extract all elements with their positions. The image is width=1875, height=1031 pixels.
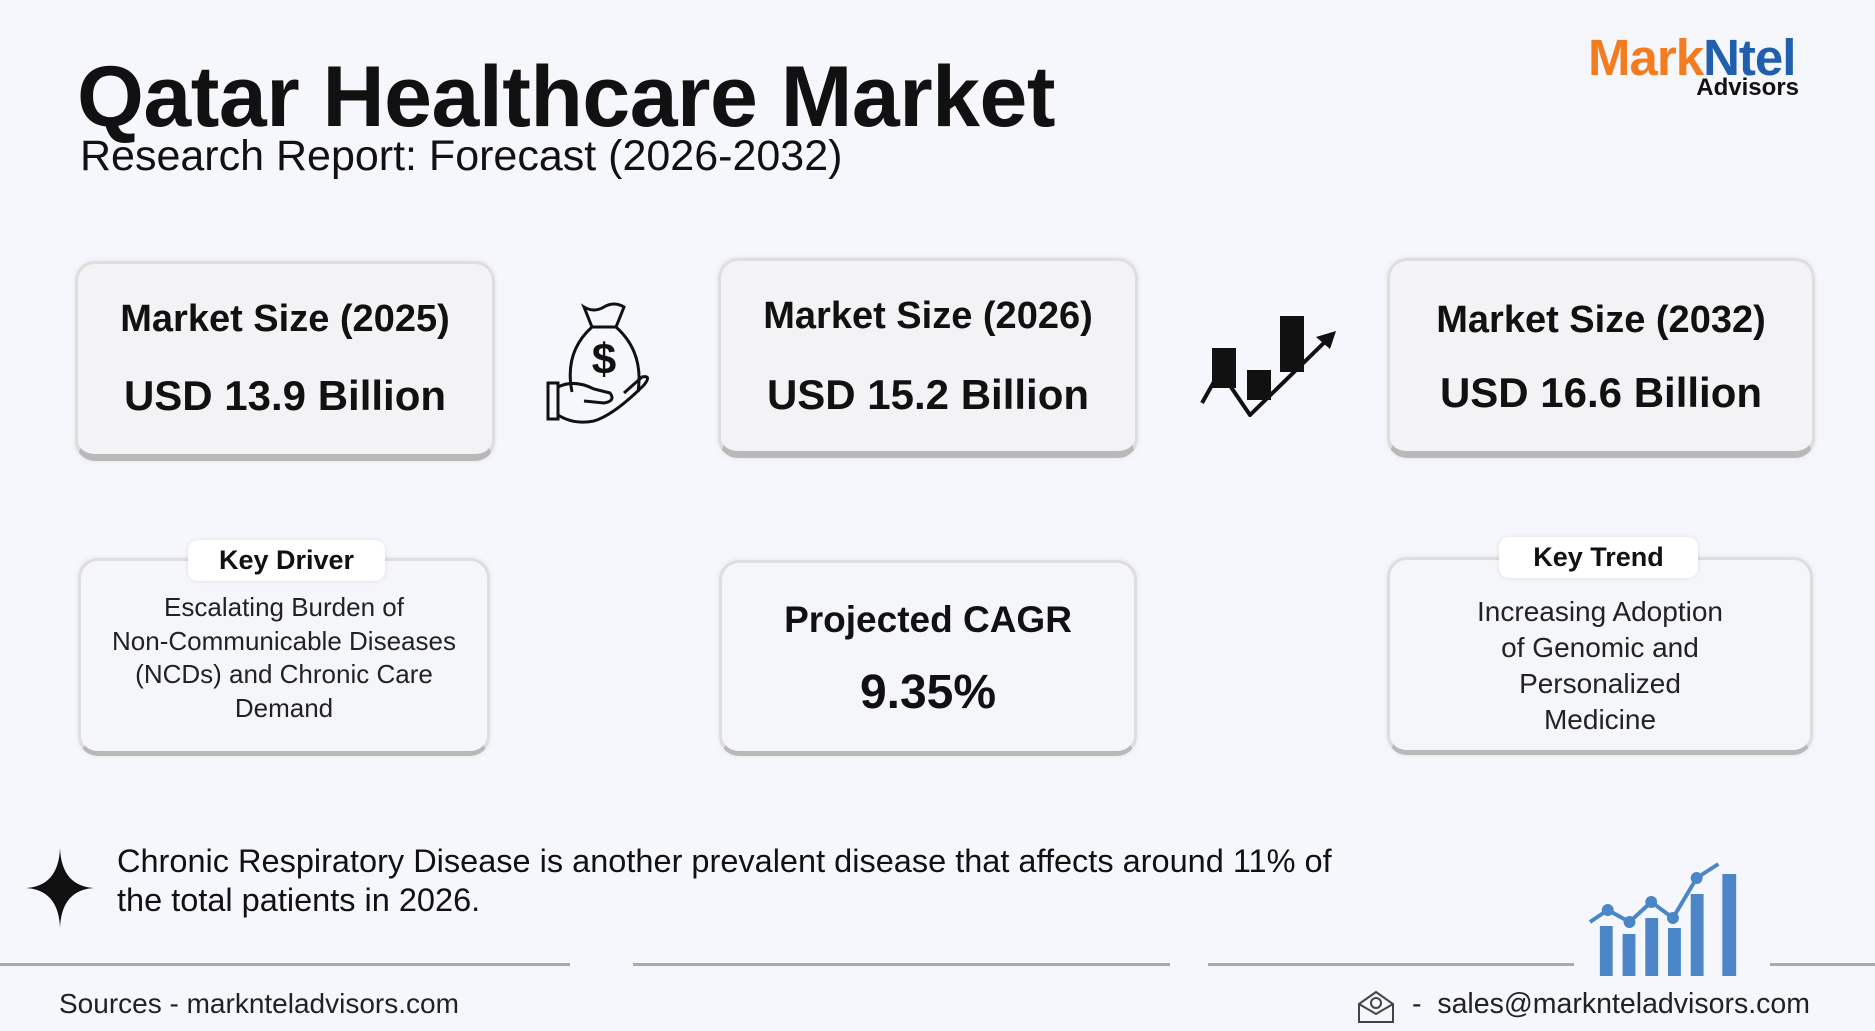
icon: growth chart arrow [1200,316,1336,417]
card: market size 2032: USD 16.6 Billion [1440,369,1762,416]
card: market size 2025: Market Size (2025) [120,298,450,340]
tab: key trend [1499,537,1698,578]
panel: projected CAGR: Projected CAGR [784,599,1072,640]
panel: key driver: Non-Communicable Diseases [112,626,456,656]
tab: key driver [188,540,385,581]
panel: key driver [78,558,490,756]
title: Qatar Healthcare Market [77,49,1055,145]
tab: key trend: Key Trend [1533,542,1664,572]
panel: projected CAGR: 9.35% [860,666,996,719]
card: market size 2025 [75,261,495,461]
panel: key trend: of Genomic and [1501,632,1699,663]
logo: MarkNtel [1588,29,1795,86]
callout text: Chronic Respiratory Disease is another prevalent disease that affects around 11% of [117,843,1332,879]
logo: Advisors [1696,74,1799,101]
footer: email: - sales@marknteladvisors.com [1412,988,1810,1020]
callout text [117,843,1332,918]
icon: sparkle star [26,848,94,928]
panel: key driver: Escalating Burden of [164,592,404,622]
panel: key driver: Demand [235,692,333,722]
panel: key trend [1387,557,1813,755]
icon: money bag in hand: $ [592,335,616,384]
footer: sources: Sources - marknteladvisors.com [59,988,459,1019]
card: market size 2026 [718,258,1138,458]
card: market size 2025: USD 13.9 Billion [124,372,446,419]
card: market size 2032: Market Size (2032) [1436,299,1766,341]
panel: key trend: Medicine [1544,704,1656,735]
panel: key trend: Increasing Adoption [1477,596,1723,627]
subtitle: Research Report: Forecast (2026-2032) [80,132,842,180]
callout text: the total patients in 2026. [117,882,480,918]
panel: key driver: (NCDs) and Chronic Care [135,659,433,689]
card: market size 2032 [1387,258,1815,458]
card: market size 2026: Market Size (2026) [763,295,1093,337]
panel: key trend: Personalized [1519,668,1681,699]
tab: key driver: Key Driver [219,545,354,575]
icon: money bag in hand [546,302,650,424]
icon: email [1358,990,1394,1023]
panel: projected CAGR [719,560,1137,756]
card: market size 2026: USD 15.2 Billion [767,371,1089,418]
icon: blue bar chart [1588,862,1736,976]
